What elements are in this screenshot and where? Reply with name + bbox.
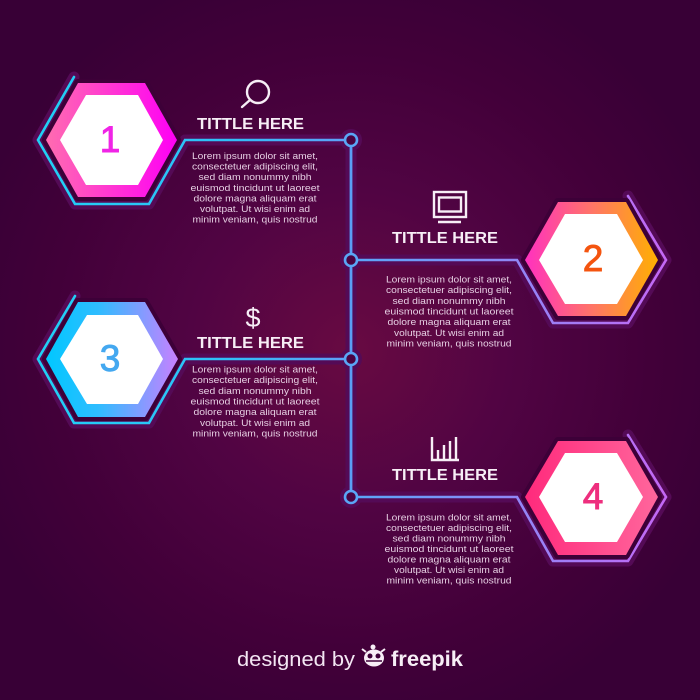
block 2: Lorem ipsum dolor sit amet, xyxy=(386,274,512,284)
block 2: consectetuer adipiscing elit, xyxy=(386,284,512,295)
block 3: volutpat. Ut wisi enim ad xyxy=(200,417,310,428)
footer credit xyxy=(237,644,463,671)
block 2 xyxy=(384,230,514,348)
block 1: euismod tincidunt ut laoreet xyxy=(190,182,320,193)
block 2: dolore magna aliquam erat xyxy=(388,316,511,327)
block 3: euismod tincidunt ut laoreet xyxy=(190,396,320,406)
hexagon 1 xyxy=(46,83,177,197)
block 4: euismod tincidunt ut laoreet xyxy=(384,543,514,554)
hexagon 2 xyxy=(525,202,658,316)
block 2: TITTLE HERE xyxy=(392,230,498,247)
block 3: minim veniam, quis nostrud xyxy=(192,428,318,438)
block 3: Lorem ipsum dolor sit amet, xyxy=(192,364,318,374)
block 2: minim veniam, quis nostrud xyxy=(386,338,512,348)
block 3: dolore magna aliquam erat xyxy=(194,406,317,417)
block 4: minim veniam, quis nostrud xyxy=(386,574,512,586)
block 4: TITTLE HERE xyxy=(392,467,498,484)
block 3: TITTLE HERE xyxy=(197,335,304,352)
block 1 xyxy=(190,116,320,224)
block 1: sed diam nonummy nibh xyxy=(198,171,312,182)
block 1: minim veniam, quis nostrud xyxy=(192,214,318,224)
block 3: consectetuer adipiscing elit, xyxy=(192,374,318,385)
icon: monitor xyxy=(434,192,466,222)
block 1: Lorem ipsum dolor sit amet, xyxy=(192,150,318,161)
hexagon 1: 1 xyxy=(100,119,120,160)
block 1: TITTLE HERE xyxy=(197,116,304,133)
block 1: consectetuer adipiscing elit, xyxy=(192,160,318,172)
block 4: dolore magna aliquam erat xyxy=(388,554,511,564)
hexagon 4: 4 xyxy=(583,476,603,517)
block 2: sed diam nonummy nibh xyxy=(392,295,506,306)
block 4 xyxy=(384,467,514,586)
hexagon 3: 3 xyxy=(100,338,120,379)
block 2: volutpat. Ut wisi enim ad xyxy=(394,327,504,338)
block 4: sed diam nonummy nibh xyxy=(392,532,506,544)
icon: dollar sign: $ xyxy=(245,303,261,333)
connector network xyxy=(38,77,666,561)
block 3: sed diam nonummy nibh xyxy=(198,385,312,396)
footer credit: designed by xyxy=(237,648,356,671)
icon: bar chart xyxy=(432,437,459,460)
hexagon 2: 2 xyxy=(583,238,603,279)
footer credit: freepik xyxy=(391,648,463,671)
icon: magnifying glass xyxy=(242,81,269,107)
block 2: euismod tincidunt ut laoreet xyxy=(384,306,514,316)
block 4: volutpat. Ut wisi enim ad xyxy=(394,564,504,575)
block 1: dolore magna aliquam erat xyxy=(194,192,317,204)
block 4: Lorem ipsum dolor sit amet, xyxy=(386,512,512,522)
block 4: consectetuer adipiscing elit, xyxy=(386,522,512,533)
block 1: volutpat. Ut wisi enim ad xyxy=(200,203,310,214)
block 3 xyxy=(190,335,320,438)
hexagon 3 xyxy=(46,302,178,417)
hexagon 4 xyxy=(525,441,658,555)
